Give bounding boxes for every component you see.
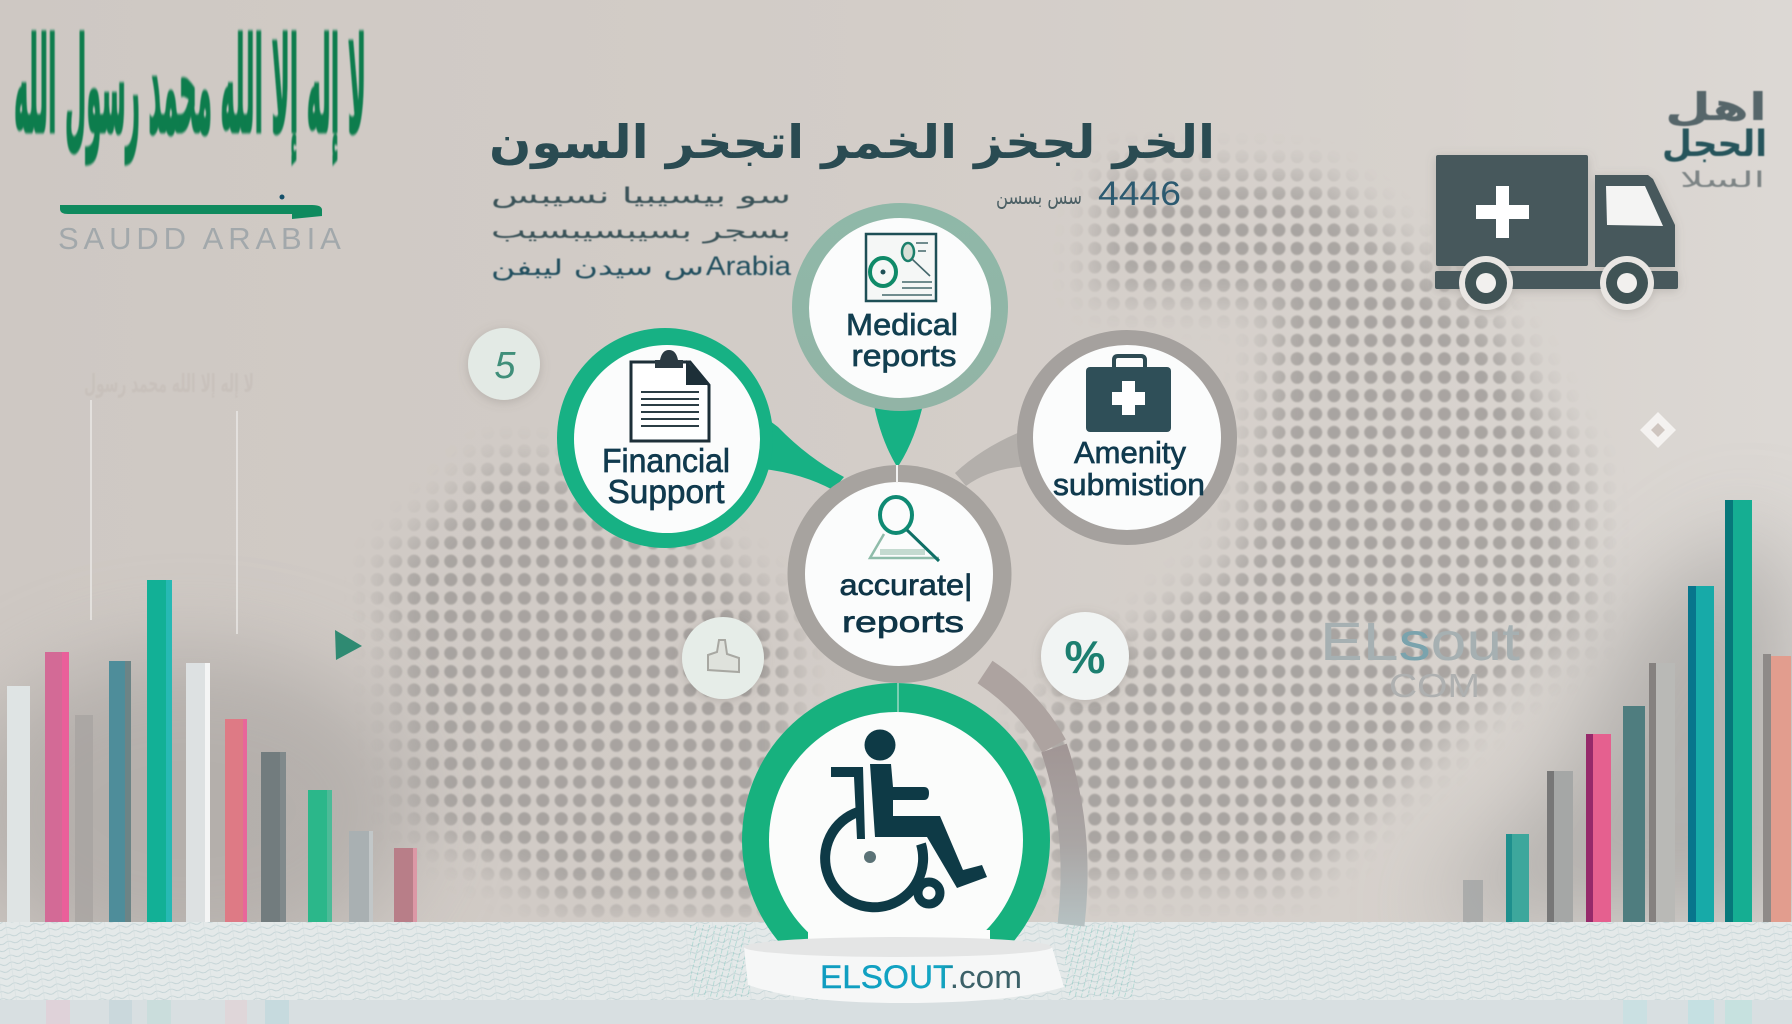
connector: medical to center bbox=[873, 400, 924, 465]
podium base bbox=[744, 937, 1064, 1003]
label: financial support: Support bbox=[608, 473, 724, 510]
label: medical reports bbox=[846, 307, 958, 373]
label: medical reports: reports bbox=[852, 338, 956, 373]
panel: financial support bbox=[557, 328, 773, 548]
label: amenity submission bbox=[1053, 435, 1205, 502]
subtitle text block: بسجر بسيبسيبسيب bbox=[491, 219, 791, 244]
title: الخر لجخز الخمر اتجخر السون bbox=[489, 115, 1215, 169]
icon: medical report document bbox=[866, 234, 936, 301]
label: ELSOUT.com: ELSOUT.com bbox=[820, 959, 1022, 995]
watermark: ELsout.com: COM bbox=[1389, 667, 1480, 704]
top right text: الحجل bbox=[1662, 124, 1767, 165]
logo: sword bbox=[60, 194, 322, 219]
icon: clipboard document bbox=[631, 350, 709, 441]
icon: medical briefcase bbox=[1086, 356, 1171, 432]
halftone dot world map bbox=[372, 154, 1598, 917]
panel: wheelchair emblem bbox=[742, 683, 1050, 941]
small badge: thumbs icon bbox=[468, 328, 540, 400]
panel: accurate reports bbox=[788, 465, 1012, 683]
icon: wheelchair bbox=[825, 730, 987, 907]
subtitle text block: Arabia bbox=[706, 251, 792, 281]
icon: arrow marker bbox=[335, 630, 362, 660]
top right text: السلا bbox=[1680, 168, 1765, 193]
small badge: percent bbox=[1041, 612, 1129, 700]
icon: ambulance truck bbox=[1435, 155, 1678, 310]
small badge: percent: % bbox=[1065, 631, 1105, 683]
connector: financial to center bbox=[755, 415, 844, 490]
panel: medical reports bbox=[792, 203, 1008, 411]
logo: country label: SAUDD ARABIA bbox=[58, 221, 343, 256]
label: amenity submission: submistion bbox=[1053, 467, 1205, 502]
text: لا إله إلا الله محمد رسول الله bbox=[14, 9, 366, 165]
top right text bbox=[1662, 85, 1767, 193]
subtitle text block: سو بيسيبيا نسيبس bbox=[491, 184, 791, 209]
connector: amenity to center bbox=[955, 428, 1030, 486]
panel: amenity submission bbox=[1017, 330, 1237, 545]
year label: 4446 bbox=[1098, 175, 1181, 213]
year label bbox=[996, 175, 1181, 213]
small badge: thumbs icon: 5 bbox=[494, 345, 516, 387]
bar chart: right bbox=[1463, 500, 1791, 922]
bar chart: left bbox=[7, 580, 417, 922]
top right text: اهل bbox=[1665, 85, 1767, 129]
year label: سس بسسن bbox=[996, 185, 1082, 209]
label: amenity submission: Amenity bbox=[1074, 435, 1186, 470]
gray gauge arc bbox=[985, 672, 1074, 925]
small badge: hand icon bbox=[682, 617, 764, 699]
subtitle text block: س سيدن ليبفن bbox=[491, 256, 704, 281]
floor bbox=[0, 922, 1792, 1024]
label: medical reports: Medical bbox=[846, 307, 958, 342]
faded watermark calligraphy: لا إله إلا الله محمد رسول bbox=[84, 369, 254, 399]
thin vertical guide lines bbox=[91, 400, 237, 634]
label: financial support bbox=[602, 442, 730, 510]
icon: magnifier bbox=[870, 497, 939, 561]
label: accurate reports bbox=[840, 569, 972, 639]
label: financial support: Financial bbox=[602, 442, 730, 479]
watermark: ELsout.com bbox=[1320, 612, 1520, 704]
subtitle text block bbox=[491, 184, 792, 281]
watermark: ELsout.com: ELsout bbox=[1320, 612, 1520, 672]
label: accurate reports: reports bbox=[842, 606, 964, 639]
icon: white diamond bbox=[1640, 412, 1676, 448]
label: accurate reports: accurate| bbox=[840, 569, 972, 602]
